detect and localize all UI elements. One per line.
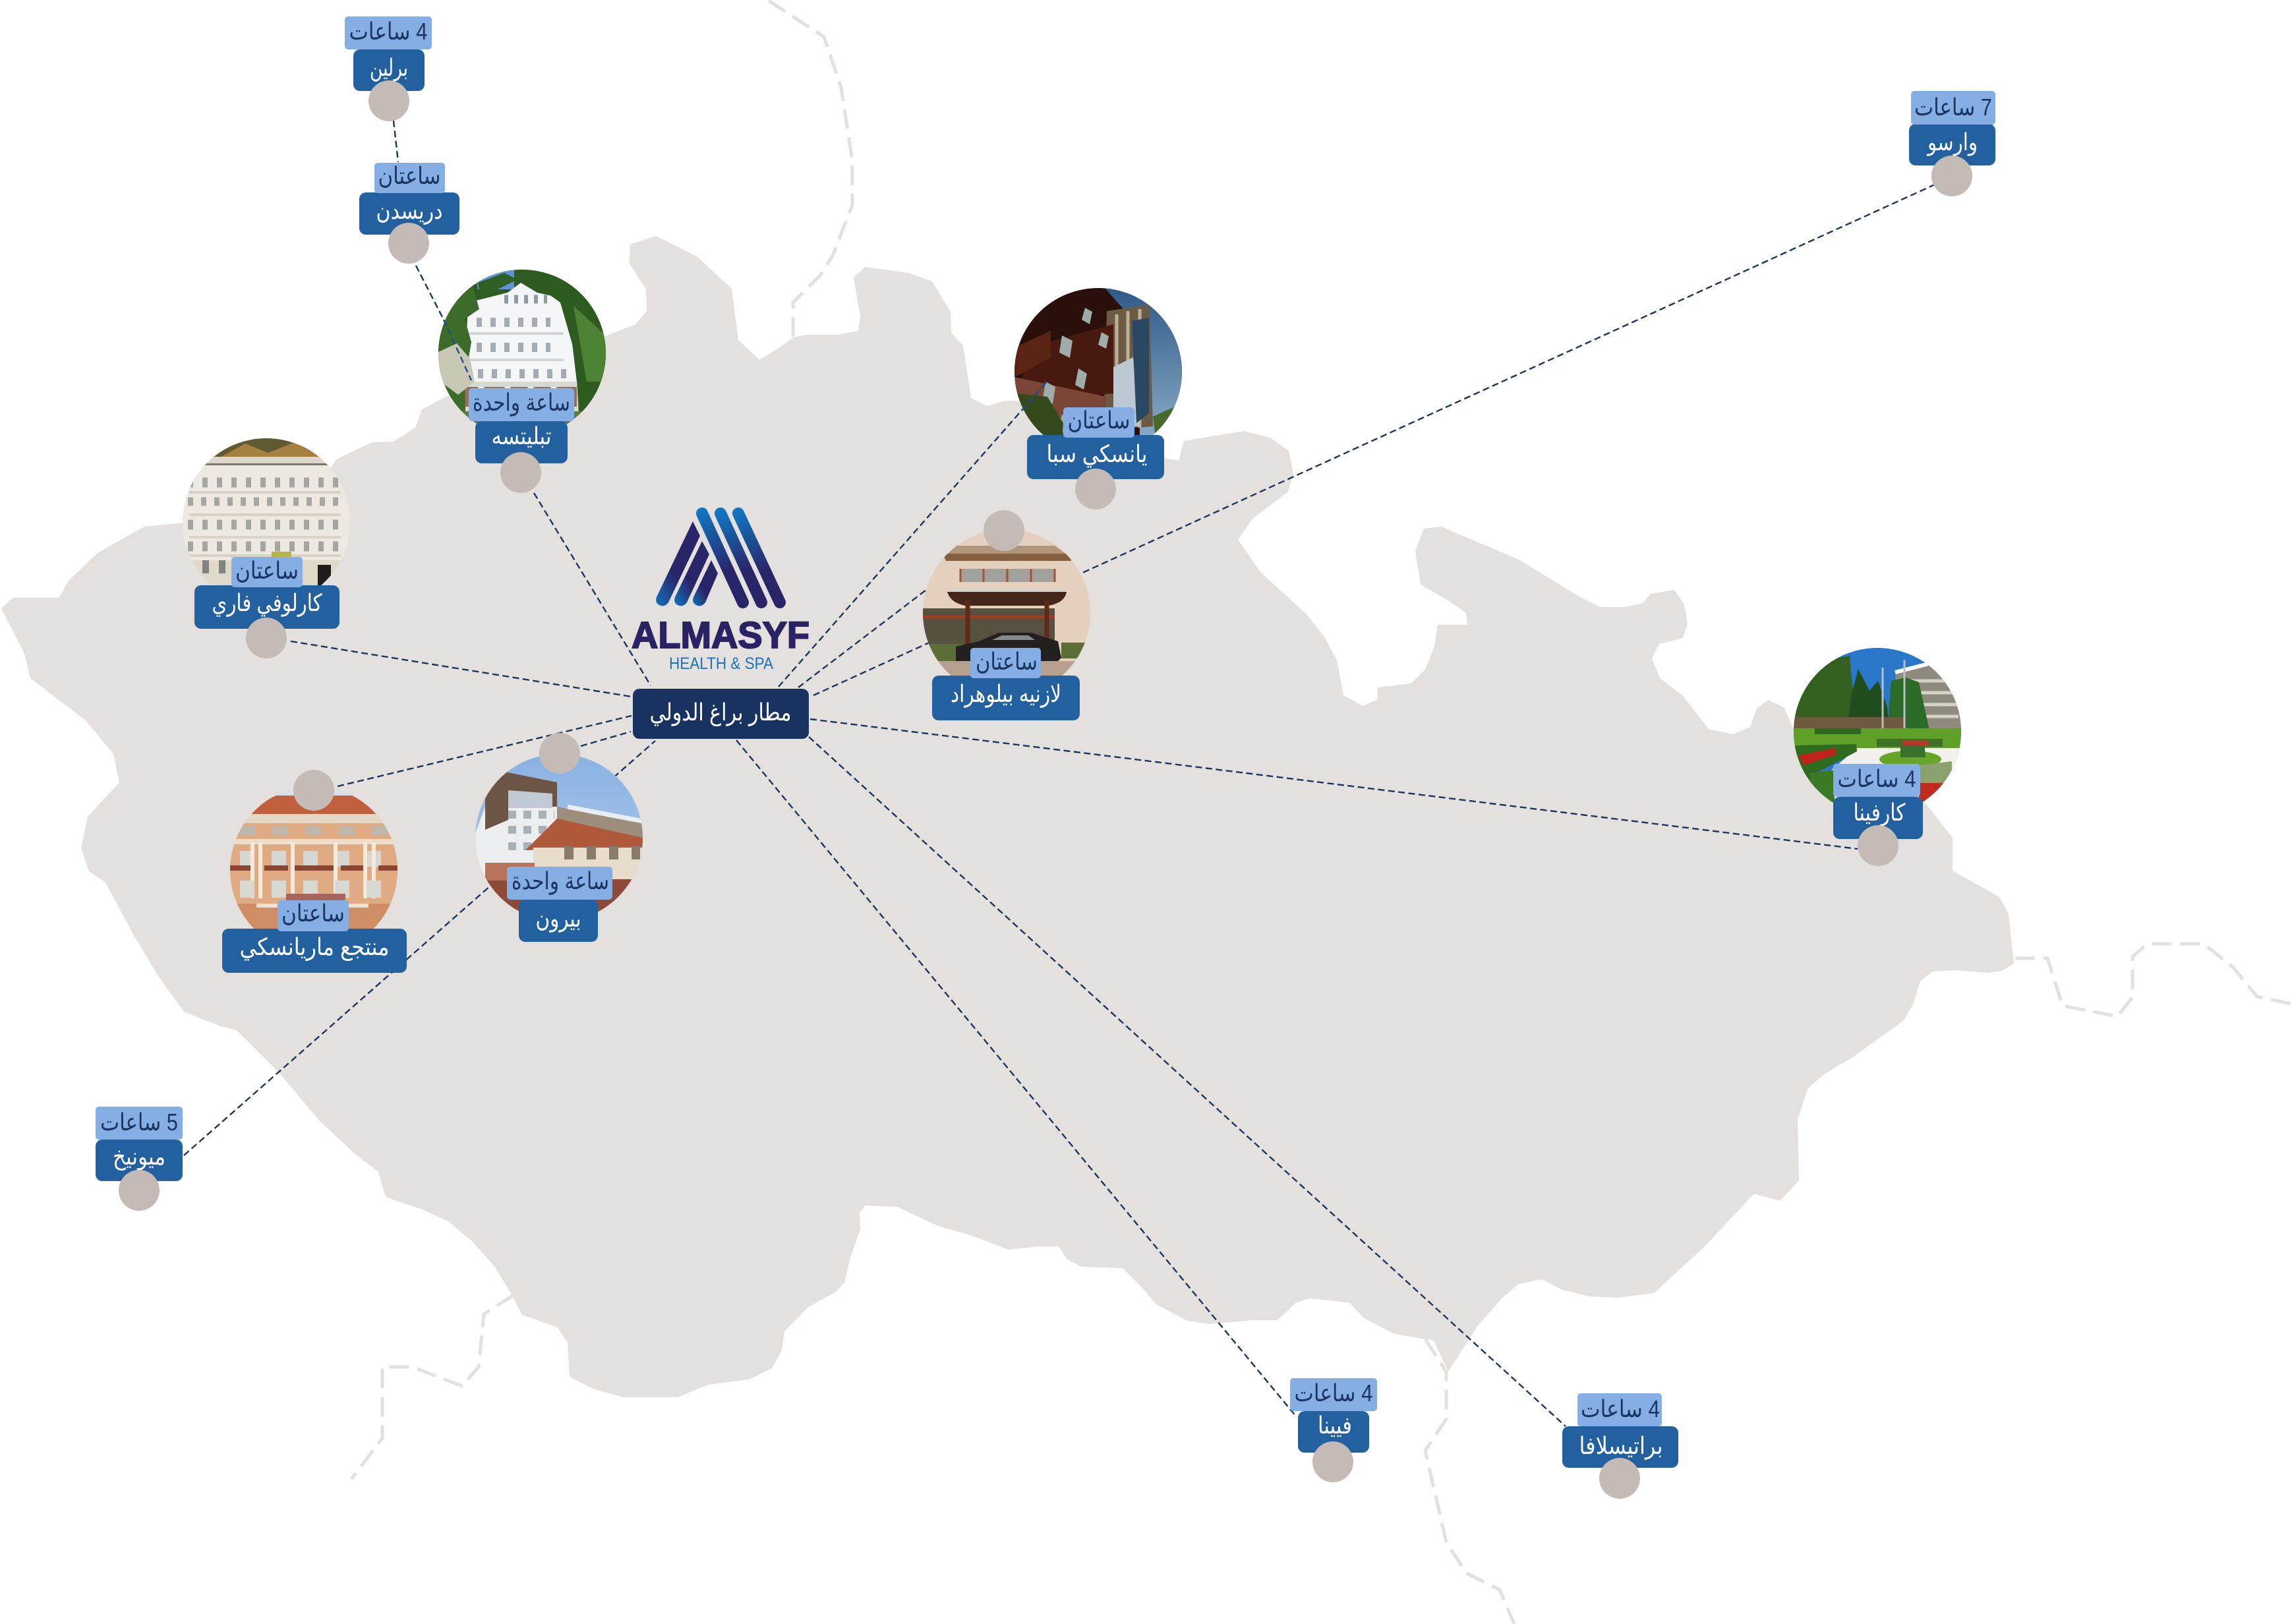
label: Beroun	[507, 733, 612, 942]
dashed route lines from the airport	[184, 121, 1935, 1426]
logo: Almasyf Health & Spa	[632, 513, 809, 673]
logo tagline: HEALTH & SPA	[669, 654, 773, 673]
label: Berlin: برلين	[370, 54, 408, 82]
label: Vienna	[1290, 1378, 1377, 1482]
label: Teplice: تبليتسه	[492, 422, 551, 450]
label: Karlovy Vary: كارلوفي فاري	[212, 589, 322, 617]
photo: Teplice hotel	[438, 270, 606, 438]
label: Karlovy Vary	[194, 557, 339, 658]
label: Beroun: بيرون	[535, 905, 581, 933]
route segments showing over photos	[444, 320, 1048, 411]
label: Warsaw	[1909, 91, 1995, 196]
airport hub label: مطار براغ الدولي	[650, 699, 791, 726]
label: Karvina	[1833, 764, 1923, 866]
label: Lazne Belohrad: ساعتان	[976, 648, 1038, 675]
label: Jansky spa: ساعتان	[1068, 407, 1130, 434]
label: Bratislava: براتيسلافا	[1579, 1432, 1662, 1460]
label: Karvina: كارفينا	[1854, 799, 1906, 826]
label: Beroun: ساعة واحدة	[512, 867, 609, 895]
label: Marianske Lazne	[222, 770, 407, 973]
label: Karlovy Vary: ساعتان	[235, 557, 299, 584]
label: Marianske Lazne: ساعتان	[281, 900, 345, 927]
photo: Karlovy Vary hotel	[183, 438, 350, 585]
label: Jansky spa: يانسكي سبا	[1047, 440, 1147, 468]
label: Munich	[96, 1107, 183, 1211]
label: Lazne Belohrad	[932, 510, 1080, 720]
label: Berlin: 4 ساعات	[349, 18, 427, 45]
photo: Karvina garden	[1794, 648, 1961, 815]
photo: Lazne Belohrad spa	[923, 531, 1090, 676]
label: Teplice: ساعة واحدة	[473, 389, 570, 417]
label: Dresden: دريسدن	[376, 197, 443, 225]
logo wordmark: ALMASYF	[632, 614, 809, 656]
airport hub label	[633, 689, 809, 739]
label: Vienna: فيينا	[1318, 1412, 1352, 1439]
label: Bratislava	[1562, 1393, 1678, 1499]
label: Munich: ميونيخ	[113, 1143, 165, 1171]
label: Jansky spa	[1027, 407, 1164, 509]
label: Karvina: 4 ساعات	[1838, 765, 1916, 792]
label: Dresden: ساعتان	[378, 162, 440, 189]
photo: Jansky spa	[1015, 288, 1182, 435]
label: Dresden	[359, 162, 459, 264]
label: Vienna: 4 ساعات	[1295, 1379, 1372, 1406]
label: Lazne Belohrad: لازنيه بيلوهراد	[951, 680, 1061, 708]
logo mark	[656, 513, 780, 606]
photo: Marianske Lazne hotel	[230, 789, 397, 929]
label: Berlin	[345, 16, 432, 121]
photo: Beroun hospital	[475, 754, 643, 921]
map of Czech Republic	[1, 236, 2014, 1397]
label: Warsaw: 7 ساعات	[1914, 94, 1992, 121]
label: Marianske Lazne: منتجع ماريانسكي	[240, 933, 389, 961]
label: Munich: 5 ساعات	[100, 1109, 178, 1136]
label: Teplice	[469, 388, 574, 493]
label: Warsaw: وارسو	[1926, 129, 1978, 156]
label: Bratislava: 4 ساعات	[1581, 1395, 1660, 1422]
